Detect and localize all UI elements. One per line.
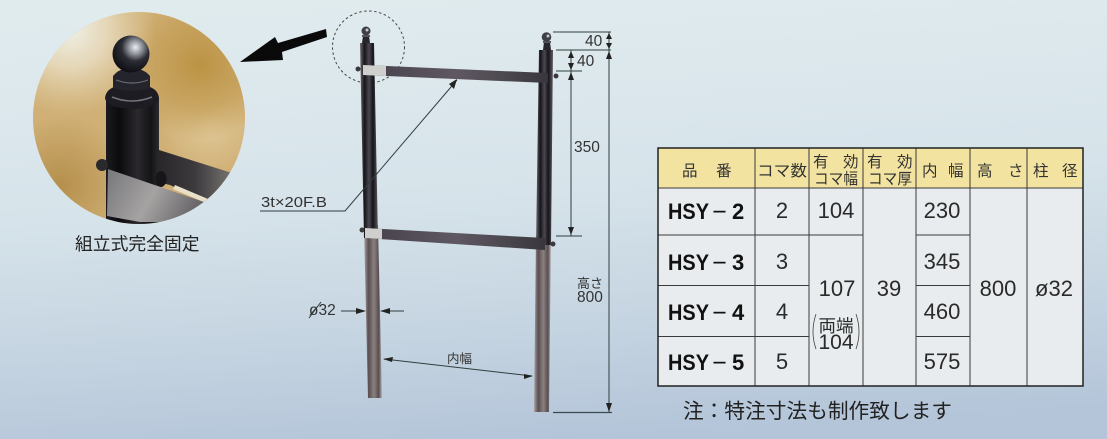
crossbar rear [159,150,230,201]
dimension: diameter 32: ø32 [309,302,336,319]
header labels: 高 [977,162,993,180]
table values: 460 [924,299,960,324]
header labels: 効 [843,153,859,171]
dimension: 40 second: 40 [577,53,595,70]
right finial [542,32,551,50]
product codes: HSY [668,199,709,224]
table values: 104 [818,198,854,223]
table values: 107 [819,276,855,301]
finial neck [113,69,150,91]
dimension: 350 [556,71,600,236]
ball [112,36,150,72]
table header background [658,148,1083,188]
arrow pointing to photo [240,29,327,62]
table values: 3 [776,249,788,274]
dimension: 40 top: 40 [585,33,603,50]
dimension: diameter 32 [309,302,404,319]
dimension: height 800: 800 [577,289,603,306]
light slot [173,185,208,203]
dimension: 350: 350 [574,139,600,156]
dimension: inner width: 内幅 [447,351,472,366]
table values: 575 [924,349,960,374]
table values: 5 [776,349,788,374]
left post lower [364,225,382,398]
header labels: 径 [1062,162,1078,180]
header labels: コマ幅 [814,170,858,188]
header labels: 柱 [1033,162,1049,180]
table values: 800 [980,276,1016,301]
header labels: コマ数 [757,162,808,180]
table values: 39 [877,276,901,301]
product codes: － [711,254,728,273]
right post [536,50,553,245]
left post [360,43,378,238]
header labels [682,153,1078,188]
product codes: － [711,203,728,222]
header labels: 番 [716,162,732,180]
dimension: 40 top [553,32,612,50]
product codes [668,199,745,375]
top crossbar [363,65,548,83]
product codes: HSY [668,300,709,325]
table values: 345 [924,249,960,274]
photo: close-up of post top [33,12,245,228]
right post lower [534,235,551,412]
bottom crossbar [365,228,545,250]
table values [776,198,1073,374]
header labels: 有 [813,153,829,171]
product codes: 2 [732,199,744,224]
note: 注：特注寸法も制作致します [683,400,952,423]
dimension: height 800: 高さ [577,276,603,291]
dimension: inner width [383,351,533,379]
rear bolt [96,159,108,171]
caption: 組立式完全固定: 組立式完全固定 [75,234,200,254]
table values: 104 [818,331,854,354]
leader: 3t×20F.B: 3t×20F.B [261,195,327,211]
collar highlight [112,97,152,101]
dimension: height 800 [553,50,612,412]
frame product photo [356,26,558,412]
header labels: 幅 [948,162,964,180]
product codes: － [711,354,728,373]
product codes: HSY [668,350,709,375]
header labels: コマ厚 [868,171,912,188]
table body background [658,188,1083,386]
dashed detail circle [332,11,404,83]
product codes: 4 [732,300,745,325]
table values: ø32 [1035,276,1073,301]
post body [106,98,159,228]
post collar [105,87,159,109]
header labels: 有 [867,153,883,171]
left finial [362,26,370,43]
table values: 両端 [818,316,854,336]
header labels: 内 [922,162,938,180]
front plate [107,169,207,222]
header labels: 品 [682,163,698,180]
table values: 230 [924,198,960,223]
inner bolt [156,171,166,187]
spec table [658,148,1083,386]
table values: 2 [776,198,788,223]
neck highlight [116,80,148,83]
table values: 4 [776,299,788,324]
product codes: 3 [732,250,744,275]
dimension: 40 second [556,50,595,71]
table grid [658,148,1083,386]
product codes: 5 [732,350,744,375]
leader: 3t×20F.B [260,79,457,211]
header labels: さ [1008,162,1024,180]
bolts [356,66,558,246]
product codes: － [711,304,728,323]
header labels: 効 [897,153,913,171]
product codes: HSY [668,250,709,275]
